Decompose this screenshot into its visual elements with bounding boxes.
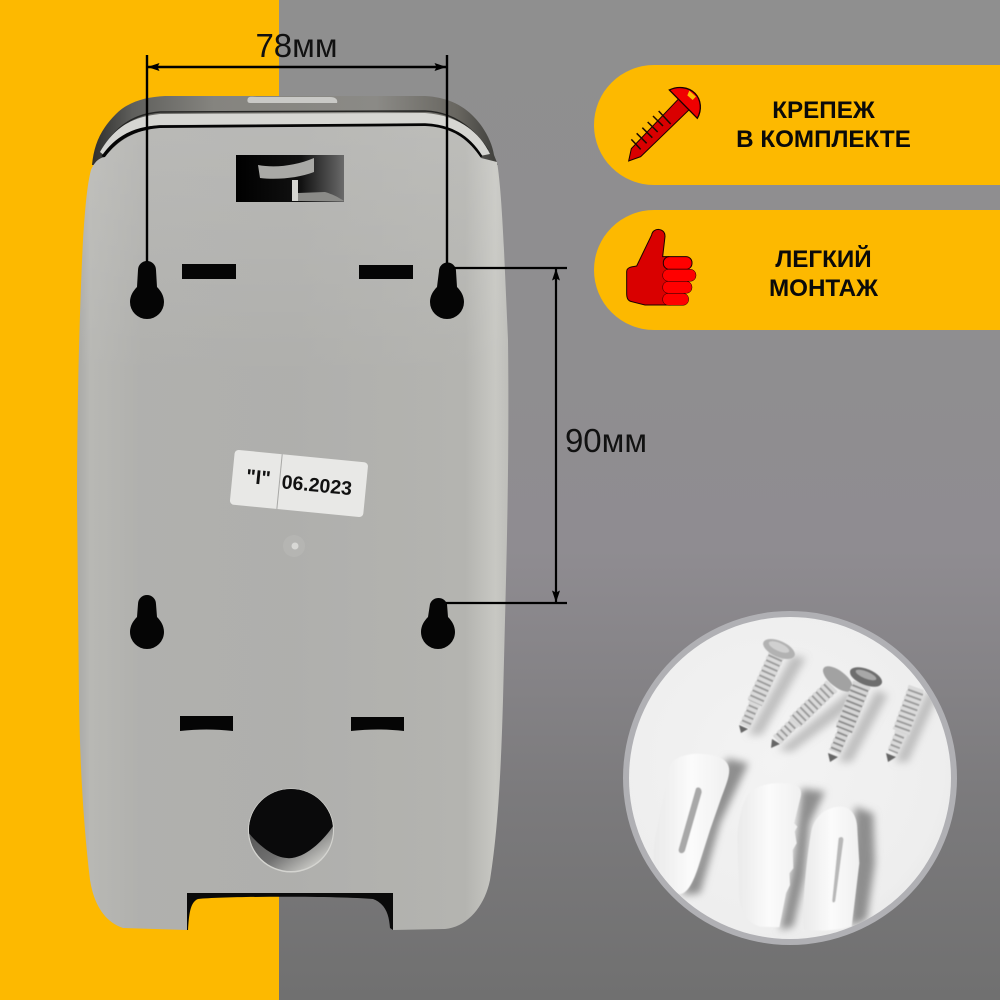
dimension: 78 mm width: 78мм [255,27,338,64]
icon: red thumbs up [627,229,696,305]
dispenser back view [77,96,508,930]
inset ring [623,611,957,945]
keyhole bottom right [421,598,455,649]
sticker label: 06.2023 [281,471,353,500]
slot top left [182,264,236,279]
badge: fasteners included: В КОМПЛЕКТЕ [736,126,911,153]
top window [236,155,344,202]
keyhole top left [130,261,164,319]
bottom notch edge [187,893,393,930]
sticker label [230,450,368,517]
silver trim strip [100,113,490,156]
top button [247,97,337,103]
keyhole bottom left [130,595,164,649]
sticker label: "I" [245,466,272,490]
center molding dot [283,535,305,557]
dark line above trim [104,111,488,150]
dimension: 90 mm height: 90мм [565,422,647,459]
badge: easy installation [594,210,1000,330]
screw four [886,688,917,762]
chrome top cover [92,96,498,165]
screw three [828,663,885,762]
round drain hole [248,788,334,872]
black seam line [103,125,481,157]
inset plate [629,617,951,939]
icon: red screw [629,88,700,161]
background: yellow band [0,0,279,1000]
main gray housing [77,126,508,930]
slot top right [359,265,413,279]
badge: easy installation: ЛЕГКИЙ [775,245,872,273]
wall dowels [654,754,859,931]
circular inset: screws and dowels [623,611,957,945]
slot bottom right [351,717,404,731]
badge: fasteners included: КРЕПЕЖ [772,97,875,124]
badge: easy installation: МОНТАЖ [769,275,878,302]
screw two [771,662,857,748]
keyhole top right [430,262,464,319]
housing highlight overlay [77,126,508,930]
shadows [682,655,938,930]
screw one [739,635,798,733]
slot bottom left [180,716,233,731]
badge: fasteners included [594,65,1000,185]
